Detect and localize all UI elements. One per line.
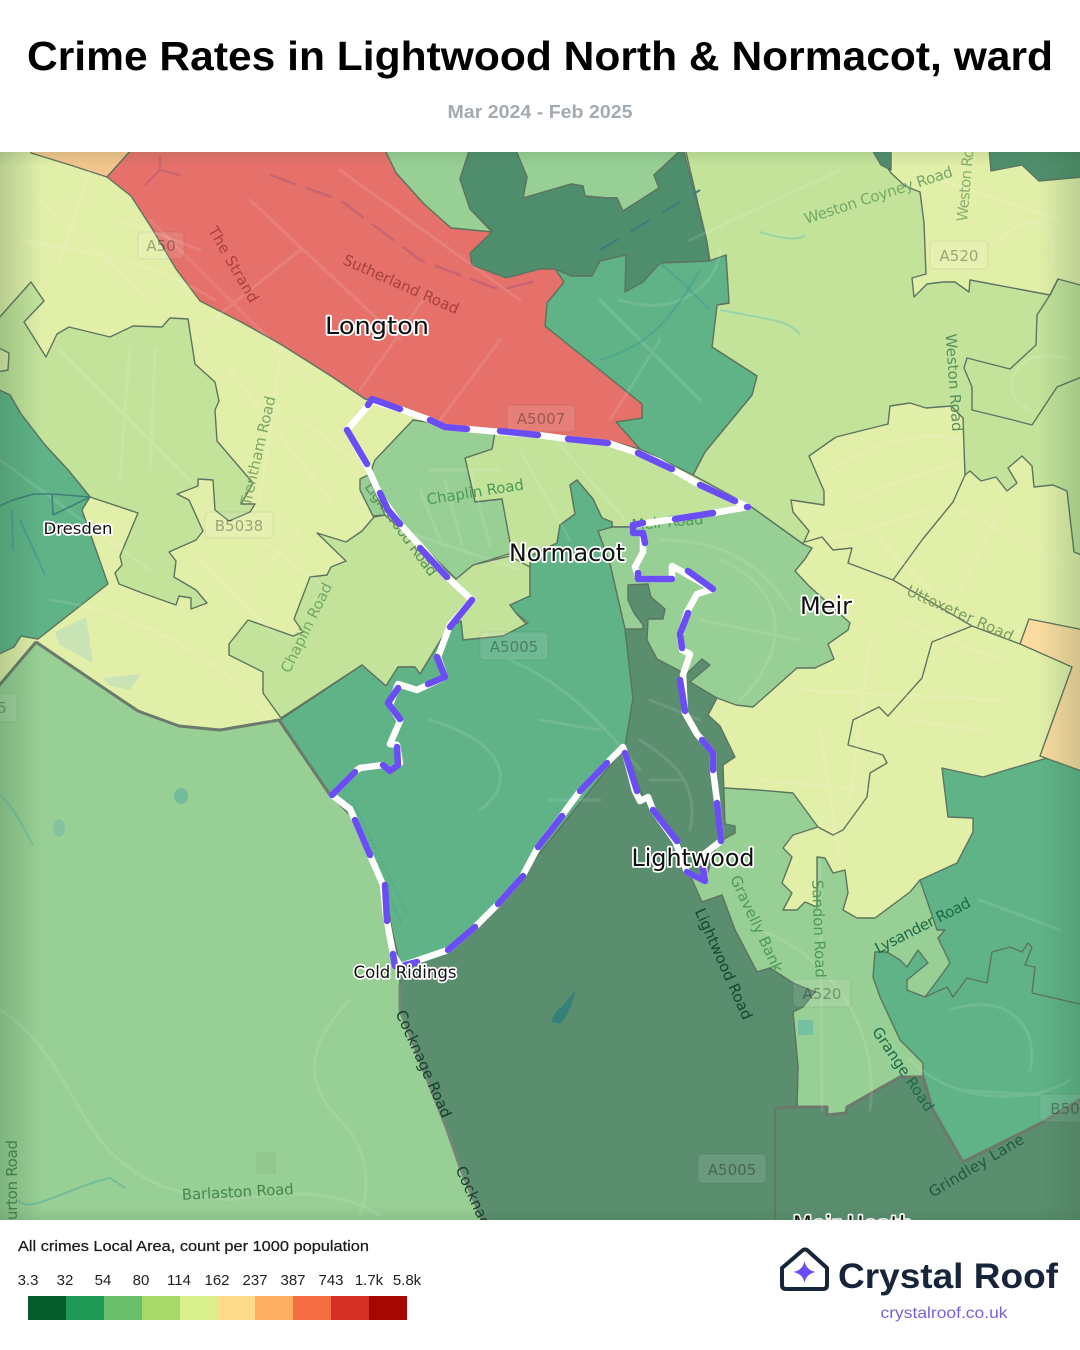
base area: pale yellow-green bbox=[0, 152, 1080, 1220]
shield: A50 bbox=[138, 232, 184, 259]
shield: A520 south: A520 bbox=[803, 985, 841, 1003]
place: Dresden: Dresden bbox=[44, 519, 112, 538]
legend tick values: 162 bbox=[204, 1272, 230, 1289]
region: central light green bbox=[229, 515, 530, 718]
shield: B50: B50 bbox=[1050, 1100, 1080, 1118]
shield: B50 bbox=[1040, 1094, 1080, 1122]
area polygons bbox=[0, 148, 1080, 1224]
road: Lightwood Road south: Lightwood Road bbox=[691, 905, 756, 1022]
place: Longton: Longton bbox=[325, 312, 429, 340]
region: top-right dark green bbox=[989, 148, 1080, 181]
legend tick values: 54 bbox=[95, 1272, 111, 1289]
region: Meir mid green bbox=[598, 506, 850, 707]
region: top mid green west bbox=[384, 148, 492, 232]
legend tick values: 3.3 bbox=[18, 1272, 38, 1289]
legend tick values: 237 bbox=[242, 1272, 268, 1289]
edge vignette bbox=[0, 152, 1080, 1220]
road: The Strand: The Strand bbox=[204, 222, 262, 306]
ward boundary purple dashes bbox=[332, 399, 748, 966]
legend colour scale bbox=[28, 1296, 407, 1320]
title: Crime Rates in Lightwood North & Normacot, ward bbox=[27, 33, 1053, 79]
brand name: Crystal Roof bbox=[838, 1257, 1058, 1296]
header bbox=[27, 33, 1053, 122]
place: Normacot: Normacot bbox=[509, 539, 625, 567]
legend tick values: 5.8k bbox=[393, 1272, 422, 1289]
road: Weston Road: Weston Road bbox=[942, 333, 966, 432]
legend tick values: 743 bbox=[318, 1272, 344, 1289]
region: Longton red bbox=[107, 148, 642, 449]
legend title: All crimes Local Area, count per 1000 population bbox=[18, 1238, 369, 1255]
region: south-west farmland mid green bbox=[0, 642, 484, 1224]
place: Lightwood: Lightwood bbox=[632, 844, 754, 872]
shield: A5007 bbox=[507, 405, 575, 432]
shield: A5005 south bbox=[698, 1154, 766, 1183]
ward boundary white casing bbox=[332, 401, 748, 966]
shield: B5038 bbox=[205, 512, 273, 538]
legend tick values bbox=[18, 1272, 422, 1289]
shield: clipped left bbox=[0, 693, 17, 722]
region: top mid green east bbox=[515, 148, 683, 211]
road: Sutherland Road: Sutherland Road bbox=[340, 251, 462, 318]
region: Lightwood dark green bbox=[625, 584, 735, 881]
place labels bbox=[44, 312, 913, 1238]
road: Uttoxeter Road: Uttoxeter Road bbox=[904, 582, 1016, 645]
legend tick values: 387 bbox=[280, 1272, 306, 1289]
region: Chaplin Road mid green bbox=[372, 420, 512, 579]
shield: A50: A50 bbox=[146, 237, 176, 255]
region: Normacot south green bbox=[280, 480, 633, 965]
region: top dark green sliver bbox=[871, 148, 891, 170]
road: Gravelly Bank: Gravelly Bank bbox=[726, 873, 787, 976]
road: Chaplin Road north: Chaplin Road bbox=[425, 476, 525, 509]
shield: A5007: A5007 bbox=[517, 410, 565, 428]
road shields bbox=[0, 232, 1080, 1183]
road: Barlaston Road: Barlaston Road bbox=[181, 1180, 294, 1204]
shield: A520 north bbox=[930, 241, 988, 269]
region: Normacot north light green bbox=[465, 432, 750, 556]
road: Cocknage Road: Cocknage Road bbox=[392, 1007, 455, 1121]
road: Grindley Lane: Grindley Lane bbox=[926, 1130, 1027, 1201]
road: Grange Road: Grange Road bbox=[868, 1024, 938, 1115]
icon: house with star bbox=[782, 1250, 827, 1289]
region: east orange bbox=[1020, 619, 1080, 772]
legend bbox=[18, 1238, 422, 1320]
place: Cold Ridings: Cold Ridings bbox=[354, 963, 457, 983]
shield: A520 north: A520 bbox=[940, 247, 978, 265]
region: small sliver mid green bbox=[360, 475, 385, 516]
legend tick values: 114 bbox=[167, 1272, 191, 1289]
Crystal Roof brand bbox=[780, 1248, 1058, 1322]
shield: A5005 north bbox=[480, 632, 548, 660]
shield: A5005 south: A5005 bbox=[708, 1161, 756, 1179]
region: green east of Longton bbox=[545, 255, 757, 475]
road: Lysander Road: Lysander Road bbox=[872, 894, 974, 957]
shield: B5038: B5038 bbox=[215, 517, 263, 535]
region: Gravelly Bank mid green bbox=[680, 788, 1000, 1115]
legend tick values: 80 bbox=[133, 1272, 149, 1289]
shield: A5005 north: A5005 bbox=[490, 638, 538, 656]
legend tick values: 1.7k bbox=[355, 1272, 384, 1289]
road: Chaplin Road south: Chaplin Road bbox=[277, 580, 336, 676]
extra boundary lines bbox=[0, 279, 1080, 1224]
faint road network bbox=[0, 170, 1070, 1215]
brand website: crystalroof.co.uk bbox=[880, 1305, 1009, 1322]
region: west light green bbox=[0, 282, 255, 609]
shield: A520 south bbox=[793, 979, 851, 1007]
region: south dark green bbox=[400, 747, 1080, 1224]
water features and rail lines bbox=[0, 155, 813, 1205]
road: Weston Coyney Road: Weston Coyney Road bbox=[802, 163, 955, 228]
ward boundary bbox=[332, 399, 748, 966]
place: Meir: Meir bbox=[800, 592, 852, 620]
road: Lightwood Road north: Lightwood Road bbox=[361, 478, 441, 580]
region: east large light green bbox=[685, 148, 1080, 556]
road: Meir Road: Meir Road bbox=[631, 510, 704, 534]
region: Dresden green bbox=[0, 389, 108, 655]
region: top dark green bbox=[460, 148, 709, 292]
region: south-east green bbox=[873, 758, 1080, 1162]
legend tick values: 32 bbox=[57, 1272, 73, 1289]
region: top-left orange bbox=[31, 148, 133, 177]
date range subtitle: Mar 2024 - Feb 2025 bbox=[448, 102, 632, 122]
road: Trentham Road: Trentham Road bbox=[237, 394, 279, 508]
road: Sandon Road: Sandon Road bbox=[808, 880, 830, 978]
choropleth map bbox=[0, 152, 1080, 1220]
